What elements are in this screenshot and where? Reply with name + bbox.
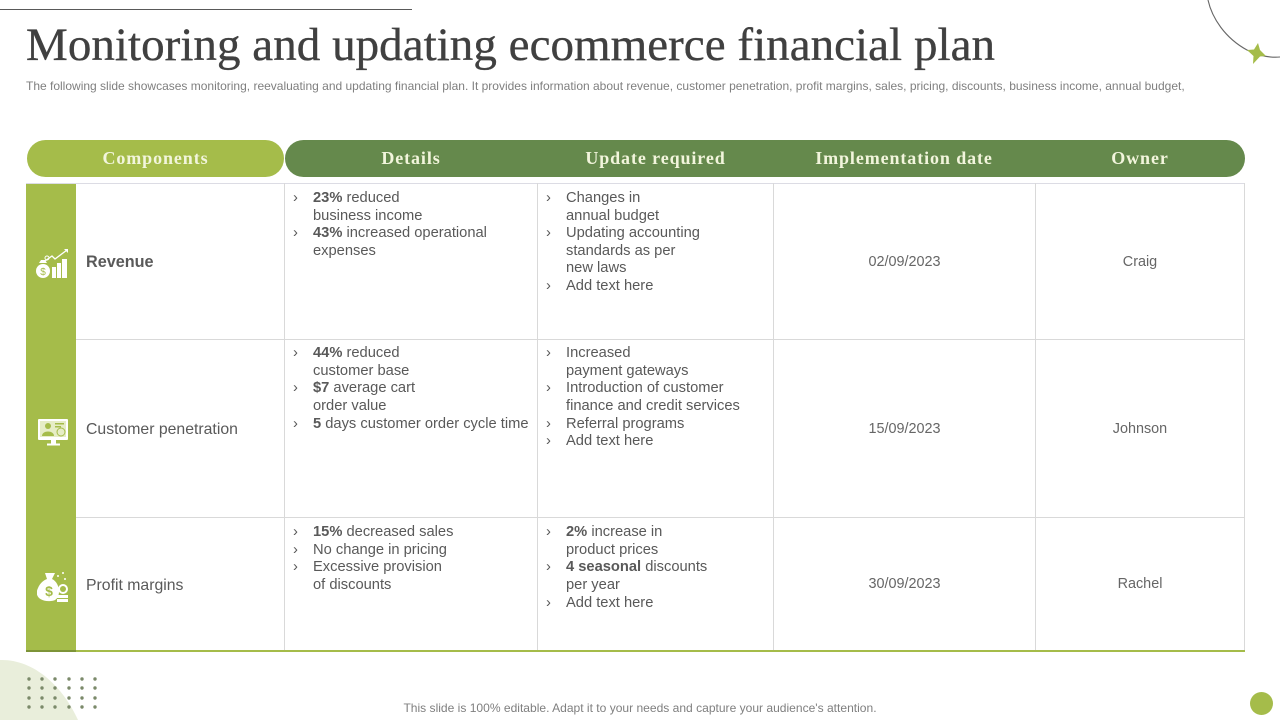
update required: profit margins: 4 seasonal discounts [566,559,707,575]
subtitle: The following slide showcases monitoring, reevaluating and updating financial plan. It provides information about revenue, customer penetration, profit margins, sales, pricing, discounts, business income, annual budget, [26,79,1185,93]
table [26,183,1245,652]
icon: money bag and coins: $ [45,583,53,599]
update required: revenue: standards as per [566,243,675,259]
update required: profit margins: › [546,595,551,611]
decorative blob bottom-left [0,660,97,720]
icon: revenue chart and coin [36,249,68,278]
title: Monitoring and updating ecommerce financial plan [26,19,995,71]
details: revenue [293,190,487,259]
details: profit margins: of discounts [313,577,391,593]
details: revenue: 23% reduced [313,190,400,206]
row dividers [76,339,1245,340]
header label: Update required: Update required [585,148,726,168]
table top border [26,183,1245,184]
footer note: This slide is 100% editable. Adapt it to your needs and capture your audience's attention. [403,701,877,715]
date: customer penetration: 15/09/2023 [868,421,941,437]
update required: revenue [546,190,700,294]
icon: money bag and coins [37,572,68,602]
update required: customer penetration: Introduction of customer [566,380,724,396]
row label: Customer penetration: Customer penetration [86,421,238,438]
update required: customer penetration: › [546,380,551,396]
details: customer penetration: customer base [313,363,409,379]
owner: profit margins: Rachel [1118,576,1162,592]
details: customer penetration: › [293,416,298,432]
details: customer penetration: order value [313,398,386,414]
header label: Details: Details [381,148,441,168]
update required: revenue: new laws [566,260,626,276]
details: revenue: › [293,190,298,206]
details: customer penetration: › [293,380,298,396]
update required: revenue: Updating accounting [566,225,700,241]
details: revenue: business income [313,208,422,224]
details: customer penetration: 44% reduced [313,345,400,361]
decorative top rule [0,9,412,10]
update required: profit margins [546,524,707,611]
details: profit margins: No change in pricing [313,542,447,558]
owner: revenue: Craig [1123,254,1157,270]
update required: customer penetration [546,345,740,449]
details: revenue: › [293,225,298,241]
update required: profit margins: › [546,559,551,575]
header: details pill [285,140,1245,177]
details: customer penetration: › [293,345,298,361]
decorative green dot [1250,692,1273,715]
icon: revenue chart and coin: $ [40,267,46,278]
icon: customer monitor [38,419,68,446]
column dividers [284,183,285,651]
details: profit margins: 15% decreased sales [313,524,453,540]
update required: profit margins: per year [566,577,620,593]
update required: profit margins: 2% increase in [566,524,662,540]
details: profit margins: › [293,524,298,540]
header: Components pill [27,140,284,177]
update required: profit margins: product prices [566,542,658,558]
update required: revenue: Add text here [566,278,653,294]
details: revenue: 43% increased operational [313,225,487,241]
update required: customer penetration: Referral programs [566,416,684,432]
update required: revenue: › [546,225,551,241]
update required: revenue: › [546,190,551,206]
row label: Revenue: Revenue [86,253,153,271]
update required: customer penetration: › [546,433,551,449]
update required: customer penetration: finance and credit services [566,398,740,414]
details: profit margins: › [293,559,298,575]
update required: revenue: Changes in [566,190,640,206]
row label: Profit margins: Profit margins [86,577,183,594]
update required: customer penetration: Increased [566,345,631,361]
header label: Implementation date: Implementation date [815,148,993,168]
details: profit margins: Excessive provision [313,559,442,575]
table right border [1244,183,1245,651]
details: customer penetration: $7 average cart [313,380,415,396]
update required: customer penetration: › [546,345,551,361]
corner arc with star [1208,0,1280,64]
details: customer penetration: 5 days customer order cycle time [313,416,528,432]
update required: profit margins: Add text here [566,595,653,611]
details: profit margins: › [293,542,298,558]
details: revenue: expenses [313,243,376,259]
update required: profit margins: › [546,524,551,540]
owner: customer penetration: Johnson [1113,421,1167,437]
update required: revenue: annual budget [566,208,659,224]
details: customer penetration [293,345,528,432]
update required: customer penetration: › [546,416,551,432]
details: profit margins [293,524,453,593]
header label: Owner: Owner [1111,148,1169,168]
update required: revenue: › [546,278,551,294]
green icon sidebar [26,184,76,652]
update required: customer penetration: payment gateways [566,363,688,379]
update required: customer penetration: Add text here [566,433,653,449]
date: profit margins: 30/09/2023 [868,576,941,592]
date: revenue: 02/09/2023 [868,254,941,270]
header: Components pill: Components [102,148,208,168]
bottom rule [26,650,1245,652]
